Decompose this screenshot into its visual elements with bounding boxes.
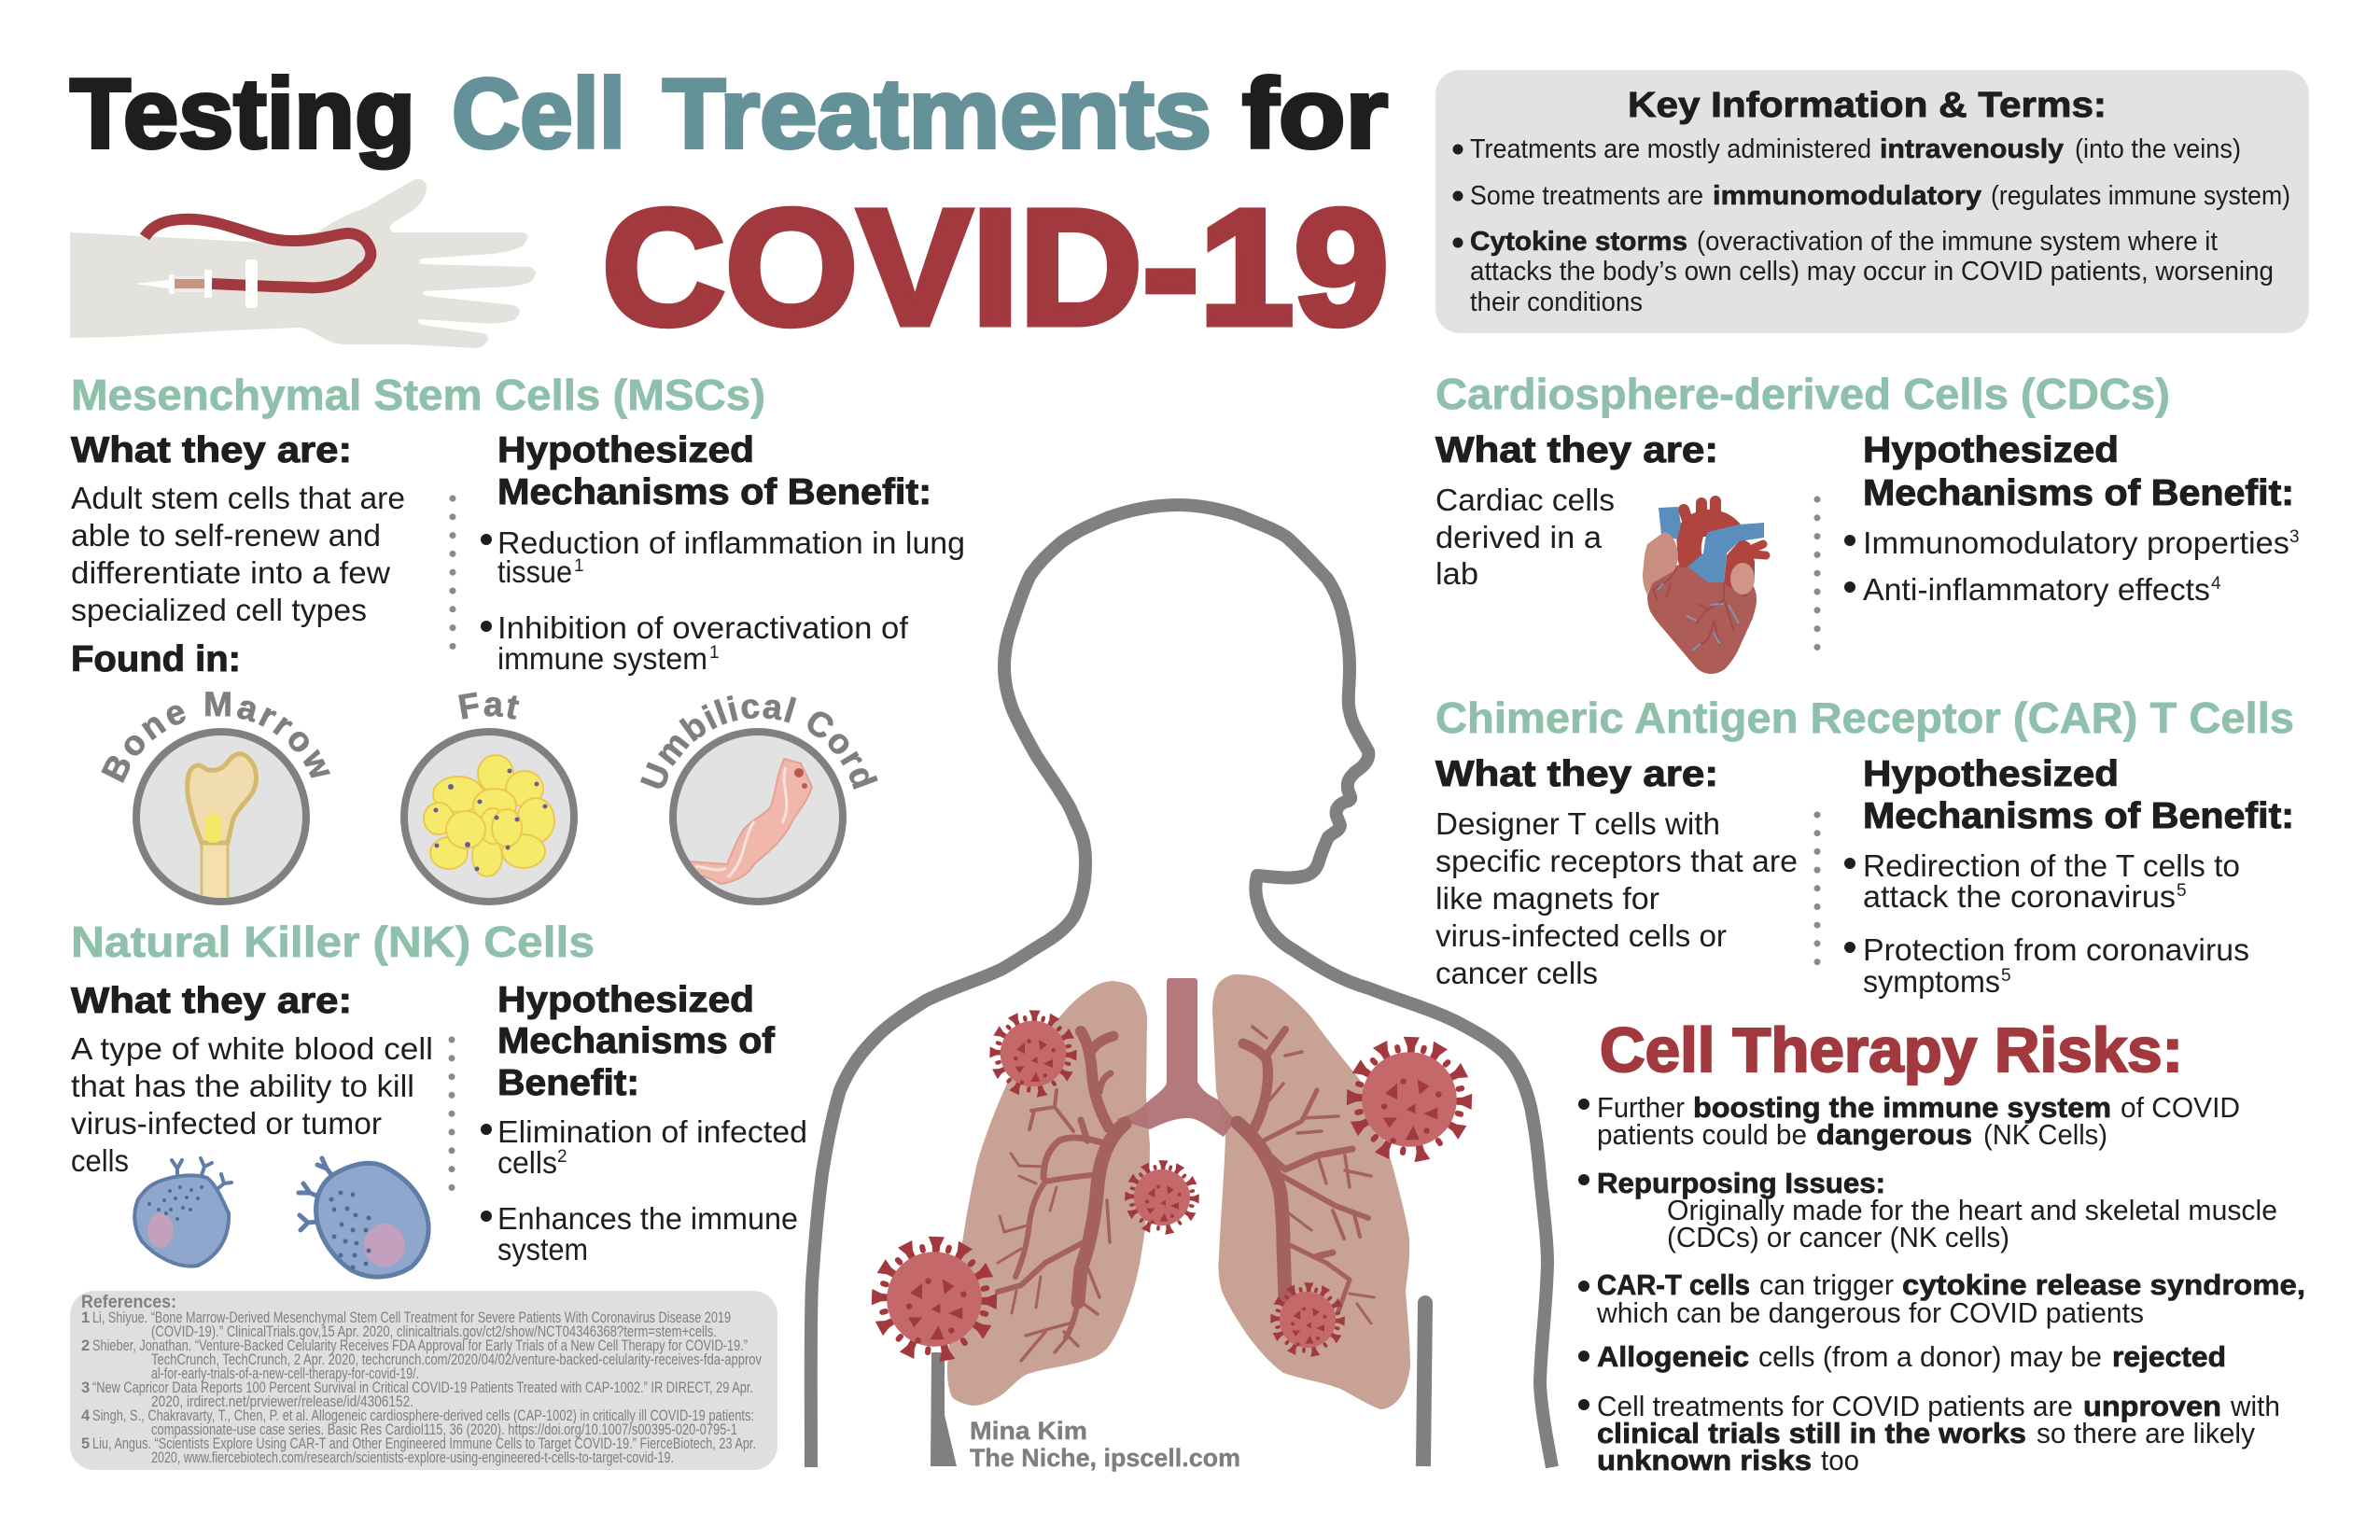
risk: CAR-T cells bbox=[1578, 1268, 2305, 1329]
MSC benefit: inflammation: tissue bbox=[497, 554, 572, 589]
risk: unproven treatments bbox=[1578, 1390, 2280, 1477]
key bullet: immunomodulatory: Some treatments are bbox=[1470, 181, 1703, 211]
left bronchi bbox=[998, 1031, 1125, 1361]
risk: CAR-T cells: CAR-T cells bbox=[1597, 1268, 1750, 1301]
NK heading: Natural Killer (NK) Cells bbox=[71, 917, 595, 966]
risk: boosting the immune system: patients could be bbox=[1597, 1118, 1807, 1151]
icon: umbilical cord bbox=[640, 694, 878, 905]
author credit: Mina Kim bbox=[970, 1417, 1087, 1445]
NK benefit: enhances: Enhances the immune bbox=[497, 1201, 798, 1236]
MSC description: differentiate into a few bbox=[71, 555, 390, 590]
CAR T benefit: protection: symptoms bbox=[1863, 964, 2000, 999]
CDC description: lab bbox=[1435, 556, 1478, 591]
CAR T benefit: redirection: Redirection of the T cells to bbox=[1863, 848, 2240, 883]
risk: repurposing issues: Originally made for the heart and skeletal muscle bbox=[1667, 1194, 2277, 1226]
CAR T what they are heading: What they are: bbox=[1435, 754, 1718, 794]
MSC benefit: inflammation bbox=[481, 525, 965, 589]
reference 3: 2020, irdirect.net/prviewer/release/id/4306152. bbox=[151, 1393, 413, 1410]
NK description: that has the ability to kill bbox=[71, 1069, 414, 1103]
CAR T description: specific receptors that are bbox=[1435, 844, 1798, 878]
right inner arm line bbox=[1423, 1302, 1425, 1466]
left inner arm line bbox=[931, 1352, 957, 1466]
panel: mesenchymal stem cells bbox=[70, 371, 965, 905]
risk: allogeneic cells: Allogeneic bbox=[1597, 1340, 1749, 1373]
key bullet: cytokine storms: their conditions bbox=[1470, 287, 1643, 317]
key bullet: intravenously bbox=[1452, 134, 2241, 164]
virus: upper right bbox=[1347, 1037, 1472, 1162]
reference 1: Li, Shiyue. “Bone Marrow-Derived Mesenchymal Stem Cell Treatment for Severe Patients With Coronavirus Disease 2019 bbox=[92, 1309, 731, 1326]
references heading: References: bbox=[81, 1293, 176, 1312]
title line: Testing Cell Treatments for: Treatments bbox=[663, 59, 1211, 169]
reference 4: Singh, S., Chakravarty, T., Chen, P. et al. Allogeneic cardiosphere-derived cells (CAP-1002) in critically ill COVID-19 patients: bbox=[92, 1407, 754, 1424]
MSC mechanisms heading: Mechanisms of Benefit: bbox=[497, 472, 931, 512]
MSC benefit: inhibition: Inhibition of overactivation of bbox=[497, 610, 909, 645]
icon: fat bbox=[400, 693, 578, 905]
human body outline bbox=[811, 505, 1552, 1467]
panel: cell therapy risks bbox=[1578, 1015, 2305, 1477]
right lung bbox=[1212, 974, 1410, 1409]
risk: boosting the immune system bbox=[1578, 1091, 2240, 1151]
risk: repurposing issues bbox=[1578, 1167, 2277, 1253]
title line: Testing Cell Treatments for: Cell bbox=[452, 59, 625, 169]
risk: CAR-T cells: which can be dangerous for COVID patients bbox=[1596, 1296, 2144, 1329]
CAR T heading: Chimeric Antigen Receptor (CAR) T Cells bbox=[1435, 693, 2294, 742]
MSC benefit: inhibition: immune system bbox=[497, 641, 707, 676]
CDC mechanisms heading bbox=[1863, 430, 2294, 513]
NK description bbox=[71, 1031, 433, 1178]
risks heading: Cell Therapy Risks: bbox=[1600, 1015, 2183, 1085]
MSC mechanisms heading: Hypothesized bbox=[497, 430, 754, 470]
risk: repurposing issues: Repurposing Issues: bbox=[1597, 1167, 1885, 1199]
MSC benefit: inhibition bbox=[481, 610, 909, 676]
CAR T description bbox=[1435, 806, 1798, 990]
CDC heading: Cardiosphere-derived Cells (CDCs) bbox=[1435, 370, 2170, 418]
CDC mechanisms heading: Mechanisms of Benefit: bbox=[1863, 473, 2294, 513]
lungs bbox=[947, 974, 1410, 1409]
key bullet: cytokine storms: attacks the body’s own cells) may occur in COVID patients, worsening bbox=[1470, 257, 2274, 287]
reference 3: “New Capricor Data Reports 100 Percent Survival in Critical COVID-19 Patients Treated with CAP-1002.” IR DIRECT, 29 Apr. bbox=[92, 1379, 753, 1396]
risk: unproven treatments: so there are likely bbox=[2037, 1417, 2255, 1449]
CAR T description: cancer cells bbox=[1435, 956, 1598, 990]
risk: allogeneic cells: cells (from a donor) may be bbox=[1758, 1340, 2102, 1373]
reference 2: 2 bbox=[81, 1337, 90, 1354]
CAR T description: Designer T cells with bbox=[1435, 806, 1720, 841]
risk: repurposing issues: (CDCs) or cancer (NK cells) bbox=[1667, 1221, 2009, 1253]
risk: unproven treatments: unproven bbox=[2083, 1390, 2221, 1422]
icon: NK cell small bbox=[134, 1158, 231, 1267]
risk: unproven treatments: too bbox=[1821, 1444, 1859, 1477]
panel: natural killer cells bbox=[71, 917, 807, 1277]
reference 1: 1 bbox=[81, 1309, 90, 1326]
risk: unproven treatments: unknown risks bbox=[1597, 1444, 1812, 1477]
icon: hand with IV line bbox=[70, 179, 536, 348]
NK description: cells bbox=[71, 1143, 129, 1178]
NK benefit: enhances bbox=[481, 1201, 798, 1267]
CDC benefit: immunomodulatory: 3 bbox=[2289, 527, 2300, 547]
panel: cardiosphere-derived cells bbox=[1435, 370, 2300, 674]
reference 2: al-for-early-trials-of-a-new-cell-therapy-for-covid-19/. bbox=[151, 1365, 419, 1382]
reference 3 bbox=[81, 1379, 753, 1410]
CAR T benefit: protection: Protection from coronavirus bbox=[1863, 932, 2249, 967]
CDC benefit: anti-inflammatory: 4 bbox=[2211, 574, 2221, 594]
title line: Testing Cell Treatments for bbox=[70, 59, 1388, 169]
reference 2: Shieber, Jonathan. “Venture-Backed Celularity Receives FDA Approval for Early Trials of a New Cell Therapy for COVID-19.” bbox=[92, 1337, 748, 1354]
key information heading: Key Information & Terms: bbox=[1628, 86, 2107, 125]
CAR T description: like magnets for bbox=[1435, 881, 1659, 916]
NK benefit: elimination: cells bbox=[497, 1145, 557, 1180]
key bullet: intravenously: (into the veins) bbox=[2075, 134, 2241, 164]
CAR T mechanisms heading: Hypothesized bbox=[1863, 754, 2119, 794]
risk: unproven treatments: with bbox=[2230, 1390, 2280, 1422]
risk: CAR-T cells: cytokine release syndrome, bbox=[1902, 1268, 2305, 1301]
MSC benefit: inflammation: Reduction of inflammation in lung bbox=[497, 525, 965, 560]
icon: heart bbox=[1643, 501, 1766, 674]
CAR T benefit: redirection bbox=[1844, 848, 2240, 914]
key bullet: immunomodulatory bbox=[1452, 181, 2290, 211]
reference 4: 4 bbox=[81, 1407, 91, 1424]
CAR T mechanisms heading: Mechanisms of Benefit: bbox=[1863, 796, 2294, 836]
NK mechanisms heading: Hypothesized bbox=[497, 980, 754, 1020]
title: COVID-19: COVID-19 bbox=[602, 176, 1389, 359]
CDC benefit: immunomodulatory: Immunomodulatory properties bbox=[1863, 525, 2289, 560]
virus: upper left bbox=[989, 1010, 1077, 1098]
risk: boosting the immune system: Further bbox=[1597, 1091, 1685, 1124]
key bullet: immunomodulatory: (regulates immune system) bbox=[1991, 181, 2290, 211]
MSC description: able to self-renew and bbox=[71, 518, 381, 553]
reference 3: 3 bbox=[81, 1379, 90, 1396]
NK mechanisms heading bbox=[497, 980, 776, 1103]
key bullet: cytokine storms: (overactivation of the immune system where it bbox=[1697, 227, 2218, 257]
NK description: A type of white blood cell bbox=[71, 1031, 433, 1066]
NK mechanisms heading: Mechanisms of bbox=[497, 1021, 776, 1061]
CAR T mechanisms heading bbox=[1863, 754, 2294, 836]
reference 5: Liu, Angus. “Scientists Explore Using CAR-T and Other Engineered Immune Cells to Target COVID-19.” FierceBiotech, 23 Apr. bbox=[92, 1435, 756, 1452]
reference 5: 2020, www.fiercebiotech.com/research/scientists-explore-using-engineered-t-cells-to-target-covid-19. bbox=[151, 1449, 674, 1466]
reference 2: TechCrunch, TechCrunch, 2 Apr. 2020, techcrunch.com/2020/04/02/venture-backed-celularity-receives-fda-approv bbox=[151, 1351, 763, 1368]
MSC description: specialized cell types bbox=[71, 593, 367, 627]
risk: unproven treatments: Cell treatments for COVID patients are bbox=[1597, 1390, 2073, 1422]
risk: boosting the immune system: boosting the immune system bbox=[1693, 1091, 2111, 1124]
CAR T benefit: redirection: 5 bbox=[2177, 881, 2187, 901]
key bullet: intravenously: Treatments are mostly administered bbox=[1470, 134, 1871, 164]
reference 4 bbox=[81, 1407, 754, 1438]
key bullet: immunomodulatory: immunomodulatory bbox=[1713, 181, 1981, 211]
MSC benefit: inflammation: 1 bbox=[574, 556, 584, 576]
CDC benefit: anti-inflammatory: Anti-inflammatory effects bbox=[1863, 572, 2210, 607]
reference 5: 5 bbox=[81, 1435, 90, 1452]
CDC description: derived in a bbox=[1435, 520, 1603, 554]
NK benefit: elimination bbox=[481, 1114, 807, 1180]
NK benefit: enhances: system bbox=[497, 1232, 588, 1267]
author credit: The Niche, ipscell.com bbox=[970, 1444, 1240, 1472]
title line: Testing Cell Treatments for: for bbox=[1242, 59, 1388, 169]
icon: umbilical cord: Umbilical Cord bbox=[640, 694, 878, 790]
risk: CAR-T cells: can trigger bbox=[1759, 1268, 1894, 1301]
risk: allogeneic cells: rejected bbox=[2112, 1340, 2226, 1373]
risk: boosting the immune system: dangerous bbox=[1816, 1118, 1972, 1151]
risk: allogeneic cells bbox=[1578, 1340, 2226, 1373]
reference 5 bbox=[81, 1435, 756, 1466]
key bullet: cytokine storms: Cytokine storms bbox=[1470, 227, 1687, 257]
risk: unproven treatments: clinical trials still in the works bbox=[1597, 1417, 2026, 1449]
CAR T benefit: protection: 5 bbox=[2001, 966, 2011, 986]
virus: lower right bbox=[1270, 1282, 1345, 1357]
reference 1: (COVID-19).” ClinicalTrials.gov,15 Apr. 2020, clinicaltrials.gov/ct2/show/NCT04346368?term=stem+cells. bbox=[151, 1323, 717, 1340]
icon: bone marrow: Bone Marrow bbox=[101, 692, 330, 783]
MSC heading: Mesenchymal Stem Cells (MSCs) bbox=[71, 371, 765, 419]
key bullet: intravenously: intravenously bbox=[1880, 134, 2064, 164]
virus: lower left bbox=[872, 1237, 997, 1362]
icon: bone marrow bbox=[101, 692, 330, 905]
CAR T benefit: protection bbox=[1844, 932, 2249, 999]
NK mechanisms heading: Benefit: bbox=[497, 1063, 639, 1103]
MSC mechanisms heading bbox=[497, 430, 931, 512]
reference 4: compassionate-use case series. Basic Res Cardiol115, 36 (2020). https://doi.org/10.1007/s00395-020-0795-1 bbox=[151, 1421, 737, 1438]
MSC description bbox=[71, 481, 405, 627]
risk: boosting the immune system: (NK Cells) bbox=[1983, 1118, 2107, 1151]
NK benefit: elimination: 2 bbox=[557, 1147, 567, 1167]
panel: key information and terms bbox=[1435, 70, 2309, 333]
NK description: virus-infected or tumor bbox=[71, 1106, 382, 1141]
panel: references bbox=[70, 1291, 777, 1470]
reference 2 bbox=[81, 1337, 763, 1382]
author credit bbox=[970, 1417, 1240, 1472]
CDC description: Cardiac cells bbox=[1435, 483, 1615, 517]
panel: CAR T cells bbox=[1435, 693, 2294, 999]
left lung bbox=[947, 981, 1150, 1406]
CDC description bbox=[1435, 483, 1615, 591]
MSC benefit: inhibition: 1 bbox=[709, 643, 720, 663]
icon: NK cell large bbox=[299, 1158, 428, 1277]
risk: boosting the immune system: of COVID bbox=[2121, 1091, 2240, 1124]
CDC mechanisms heading: Hypothesized bbox=[1863, 430, 2119, 470]
NK what they are heading: What they are: bbox=[71, 981, 352, 1021]
virus particles bbox=[872, 1010, 1472, 1362]
found in heading: Found in: bbox=[71, 639, 241, 679]
reference 1 bbox=[81, 1309, 731, 1340]
right bronchi bbox=[1238, 1027, 1374, 1323]
virus: center bbox=[1125, 1160, 1199, 1235]
trachea bbox=[1116, 978, 1236, 1137]
CAR T benefit: redirection: attack the coronavirus bbox=[1863, 879, 2176, 914]
NK benefit: elimination: Elimination of infected bbox=[497, 1114, 807, 1149]
icon: fat: Fat bbox=[458, 693, 519, 720]
CDC what they are heading: What they are: bbox=[1435, 430, 1718, 470]
MSC what they are heading: What they are: bbox=[71, 430, 352, 470]
MSC description: Adult stem cells that are bbox=[71, 481, 405, 515]
CAR T description: virus-infected cells or bbox=[1435, 918, 1727, 953]
key bullet: cytokine storms bbox=[1452, 227, 2274, 317]
title line: Testing Cell Treatments for: Testing bbox=[70, 59, 415, 169]
